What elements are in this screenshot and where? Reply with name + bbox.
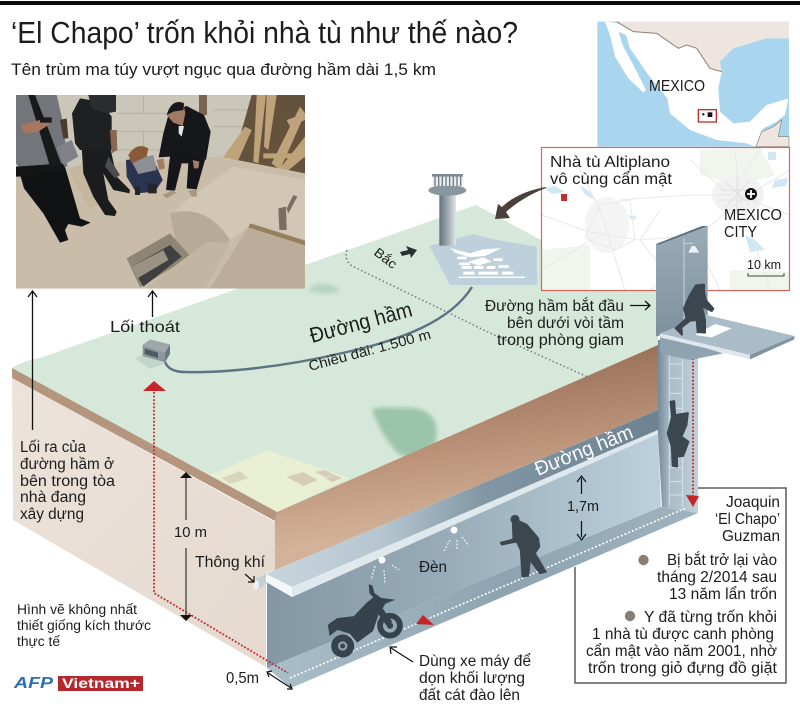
left soil strip	[12, 368, 277, 521]
arrow to shower	[630, 301, 650, 310]
ventilation label: Thông khí	[195, 554, 266, 571]
icon: north arrow	[400, 246, 417, 258]
exit note: xây dựng	[20, 506, 84, 523]
callout bullet two: Y đã từng trốn khỏi	[644, 609, 777, 626]
photo of tunnel exit	[16, 95, 305, 289]
photo: plank by officer	[68, 164, 98, 210]
tunnel height dimension	[567, 476, 599, 540]
person exiting cell	[676, 285, 713, 335]
title: ‘El Chapo’ trốn khỏi nhà tù như thế nào?	[11, 15, 518, 50]
inset: Mexico City label: MEXICO	[724, 207, 782, 224]
ventilation label	[195, 554, 266, 582]
arrow to motorbike	[390, 647, 413, 662]
tunnel start note	[485, 298, 624, 349]
motorbike note: Dùng xe máy để	[419, 653, 531, 670]
small green patch	[307, 284, 340, 294]
callout bullet one	[638, 552, 777, 603]
tunnel width dimension	[226, 670, 292, 689]
logo: AFP: AFP	[13, 675, 53, 692]
inset: roads	[541, 150, 790, 290]
photo: left man	[18, 163, 91, 243]
arrow to photo hole	[148, 291, 157, 317]
tunnel back wall	[267, 433, 661, 668]
scale disclaimer: thực tế	[17, 634, 60, 649]
floor dotted trail	[290, 508, 686, 678]
map: Central America	[756, 120, 789, 147]
tunnel height dimension: 1,7m	[567, 498, 599, 515]
exit building	[135, 339, 170, 369]
exit note: nhà đang	[20, 489, 86, 506]
map: United States	[617, 22, 789, 72]
inset: water	[545, 152, 788, 252]
inset: city blobs	[585, 197, 629, 253]
photo: cover stones	[173, 242, 226, 287]
photo: timber stack	[233, 95, 305, 175]
inset: prison label	[550, 154, 673, 188]
callout name: Guzman	[722, 528, 780, 545]
exit note: đường hầm ở	[20, 456, 114, 473]
photo: hole	[127, 233, 191, 287]
icon: climbing person	[668, 401, 689, 467]
ventilation pipe	[253, 573, 272, 590]
tunnel label on ledge: Đường hầm	[532, 421, 636, 481]
scale disclaimer: thiết giống kích thước	[17, 618, 151, 633]
map: prison region inset	[540, 147, 790, 290]
red arrow on floor	[416, 615, 434, 625]
inset: prison label: Nhà tù Altiplano	[550, 154, 670, 171]
callout bullet two: trốn trong giỏ đựng đồ giặt	[588, 660, 778, 677]
callout bullet two: 1 nhà tù được canh phòng	[592, 626, 774, 643]
prison buildings	[450, 248, 525, 278]
exit note: bên trong tòa	[20, 473, 115, 490]
map: locator box	[698, 110, 716, 122]
scale disclaimer	[17, 602, 151, 649]
inset: prison marker	[561, 194, 567, 201]
lamps	[371, 526, 469, 584]
ground surface	[12, 205, 658, 512]
callout bullet one: 13 năm lẩn trốn	[669, 586, 777, 603]
callout bullet one: tháng 2/2014 sau	[657, 569, 777, 586]
exit label: Lối thoát	[110, 319, 181, 336]
callout name: ‘El Chapo’	[715, 511, 780, 528]
photo: crouching woman	[126, 157, 163, 193]
photo: centre officer	[82, 147, 130, 216]
inset: green areas	[540, 148, 790, 290]
photo: sand floor	[66, 156, 305, 175]
cell wall	[656, 226, 708, 337]
prison compound	[429, 234, 537, 285]
photo: back wall	[16, 95, 256, 175]
motorbike note	[419, 653, 531, 704]
lamp label: Đèn	[419, 559, 447, 576]
arrow from inset to prison	[495, 187, 546, 219]
tunnel floor	[267, 507, 698, 688]
red route vertical in shaft	[692, 333, 694, 497]
motorbike note: đất cát đào lên	[419, 687, 520, 704]
depth dimension	[174, 472, 207, 621]
tunnel ledge	[266, 410, 658, 587]
exit note	[20, 439, 115, 523]
callout: Joaquin El Chapo Guzman	[575, 488, 786, 683]
tower	[439, 192, 456, 246]
exit note: Lối ra của	[20, 439, 86, 456]
shower pipe and head	[682, 238, 685, 327]
photo: suited man	[166, 155, 205, 191]
forest patch	[372, 407, 437, 458]
tunnel cross-section	[253, 333, 699, 688]
farm field patch	[210, 450, 350, 512]
tunnel start note: trong phòng giam	[497, 332, 624, 349]
icon: motorbike	[328, 585, 402, 657]
right soil face	[266, 345, 658, 574]
map: Mexico overview	[597, 22, 789, 147]
cell floor hole	[695, 324, 732, 337]
map: sea	[597, 22, 789, 147]
map: Mexico land	[605, 22, 788, 147]
inset: Mexico City marker	[745, 188, 757, 200]
red arrow in shaft	[686, 495, 699, 507]
left beige wall	[12, 378, 275, 667]
shaft	[658, 340, 698, 513]
ladder	[669, 350, 683, 507]
photo: mound	[170, 211, 230, 255]
tunnel length label: Chiều dài: 1.500 m	[307, 326, 432, 374]
cell floor	[660, 315, 794, 355]
arrow to building	[28, 291, 37, 430]
callout bullet two: cẩn mật vào năm 2001, nhờ	[586, 643, 777, 660]
inset: Mexico City label	[724, 207, 782, 241]
tunnel width dimension: 0,5m	[226, 670, 259, 687]
motorbike note: dọn khối lượng	[419, 670, 525, 687]
dotted prison perimeter	[346, 250, 590, 378]
scale disclaimer: Hình vẽ không nhất	[17, 602, 137, 617]
tunnel start note: Đường hầm bắt đầu	[485, 298, 624, 315]
3D ground block	[12, 205, 658, 667]
subtitle: Tên trùm ma túy vượt ngục qua đường hầm dài 1,5 km	[11, 60, 436, 79]
depth dimension: 10 m	[174, 524, 207, 541]
inset: scale bar: 10 km	[747, 257, 781, 272]
tunnel start note: bên dưới vòi tầm	[507, 315, 624, 332]
callout name: Joaquin	[726, 494, 780, 511]
north label	[371, 245, 417, 272]
prison and watch tower	[428, 174, 537, 285]
cell with shower	[656, 226, 794, 360]
tunnel line on the surface	[165, 287, 472, 372]
callout bullet two	[586, 609, 778, 677]
inset: prison label: vô cùng cẩn mật	[550, 170, 673, 188]
inset: Mexico City label: CITY	[724, 224, 757, 241]
callout bullet one: Bị bắt trở lại vào	[667, 552, 777, 569]
north label: Bắc	[371, 245, 401, 272]
icon: walking person	[501, 516, 546, 577]
map label: Mexico: MEXICO	[649, 78, 705, 95]
red route to exit	[143, 381, 288, 673]
callout name	[715, 494, 780, 545]
tunnel label on surface: Đường hầm	[307, 297, 415, 348]
logo: Vietnam+: Vietnam+	[62, 676, 140, 691]
